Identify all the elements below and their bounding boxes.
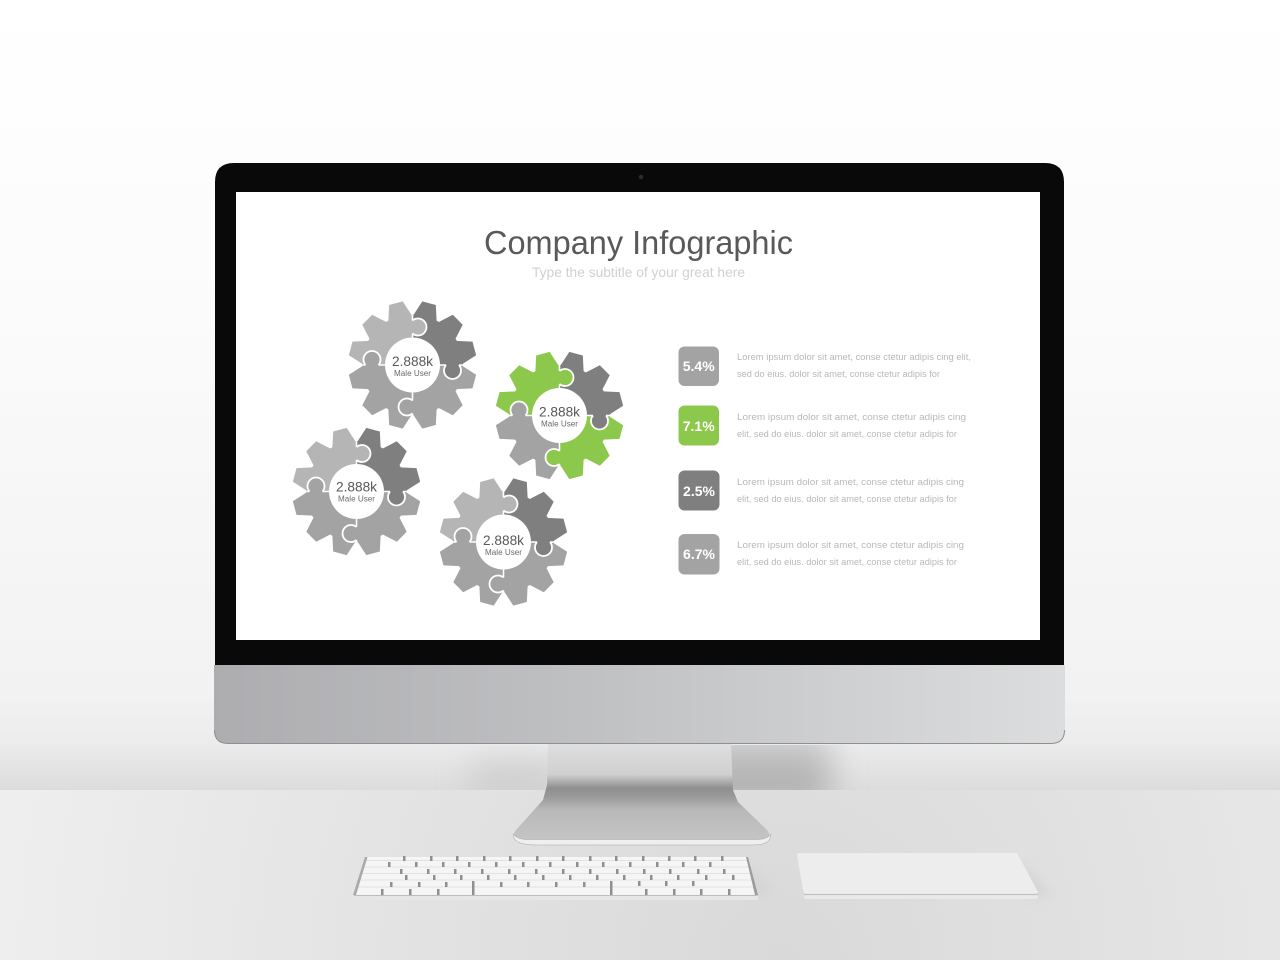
description 4: Lorem ipsum dolor sit amet, conse ctetur adipis cing: [737, 540, 964, 550]
badge 2.5%: [678, 470, 720, 510]
gear: right green: 2.888k: [539, 404, 581, 420]
gear: top left: Male User: [394, 369, 431, 378]
chin lower edge: [214, 730, 1064, 744]
description 1: sed do eius. dolor sit amet, conse ctetur adipis for: [737, 369, 940, 379]
gear: lower centre: [438, 476, 570, 608]
monitor shadow on wall: [472, 745, 844, 790]
gear: lower left: 2.888k: [336, 478, 378, 494]
badge 6.7%: [678, 534, 720, 574]
list item 3: [678, 470, 964, 510]
gear: lower left: [290, 426, 422, 558]
gear: top left: [346, 299, 478, 431]
description 1: Lorem ipsum dolor sit amet, conse ctetur adipis cing elit,: [737, 352, 971, 362]
badge 7.1%: [678, 406, 719, 446]
subtitle: Type the subtitle of your great here: [532, 264, 745, 280]
gear: top left: 2.888k: [392, 353, 434, 369]
monitor body: [214, 163, 1065, 744]
monitor chin: [214, 665, 1065, 744]
monitor bezel: [215, 163, 1064, 665]
badge 6.7%: 6.7%: [683, 546, 716, 562]
description 1: [737, 352, 971, 379]
gear: lower left: Male User: [338, 494, 375, 504]
keyboard: [353, 856, 775, 900]
desk surface: [0, 790, 1280, 960]
badge 5.4%: [678, 346, 719, 386]
gear: lower centre: Male User: [485, 548, 522, 557]
description 4: elit, sed do eius. dolor sit amet, conse ctetur adipis for: [737, 557, 957, 567]
trackpad: [797, 853, 1052, 899]
gear: right green: [494, 350, 626, 482]
badge 5.4%: 5.4%: [683, 358, 715, 374]
description 3: [737, 477, 964, 504]
list item 2: [678, 406, 966, 446]
description 4: [737, 540, 964, 567]
list item 1: [678, 346, 971, 386]
monitor stand: [513, 744, 771, 845]
gear: right green: Male User: [541, 420, 578, 428]
description 2: Lorem ipsum dolor sit amet, conse ctetur adipis cing: [737, 412, 966, 422]
screen: [236, 192, 1040, 640]
list item 4: [678, 534, 964, 574]
badge 7.1%: 7.1%: [683, 418, 715, 434]
description 3: Lorem ipsum dolor sit amet, conse ctetur adipis cing: [737, 477, 964, 487]
badge 2.5%: 2.5%: [683, 483, 716, 499]
description 2: elit, sed do eius. dolor sit amet, conse ctetur adipis for: [737, 429, 957, 439]
description 3: elit, sed do eius. dolor sit amet, conse ctetur adipis for: [737, 494, 957, 504]
gear: lower centre: 2.888k: [483, 532, 525, 548]
title: Company Infographic: [484, 224, 793, 261]
webcam: [639, 175, 643, 179]
description 2: [737, 412, 966, 439]
